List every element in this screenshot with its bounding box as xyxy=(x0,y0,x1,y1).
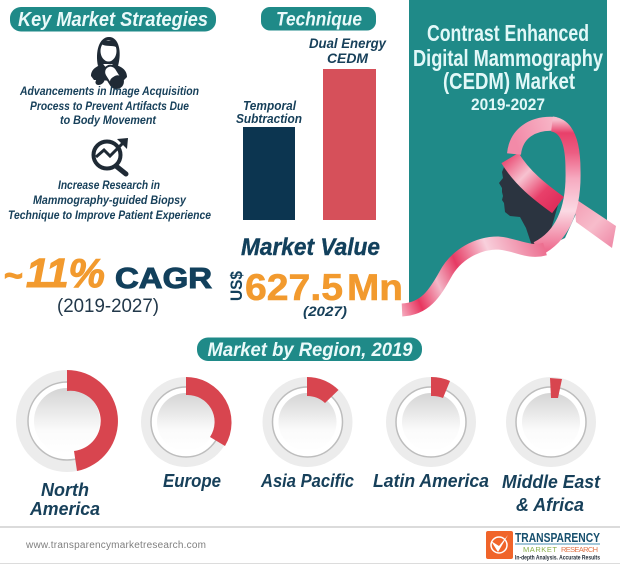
title: (CEDM) Market xyxy=(443,68,575,94)
stat: market value: 627.5 xyxy=(245,267,343,308)
donut: Middle East & Africa xyxy=(506,377,596,467)
donut: North America xyxy=(16,370,118,472)
label: Middle East & Africa xyxy=(502,472,601,515)
label: Temporal Subtraction xyxy=(236,99,302,126)
icon: magnifier with trend arrow xyxy=(94,138,128,174)
text: strategy one xyxy=(19,86,199,127)
label: North America: North xyxy=(41,480,89,500)
donut: Europe xyxy=(141,377,232,467)
label: North America: America xyxy=(29,499,100,519)
label: Dual Energy CEDM: Dual Energy xyxy=(309,36,387,51)
text: strategy one: to Body Movement xyxy=(60,115,157,127)
bar: Dual Energy CEDM xyxy=(323,69,376,220)
title: 2019-2027 xyxy=(471,95,545,114)
icon: woman with pill xyxy=(91,37,127,90)
logo: Transparency Market Research xyxy=(486,531,601,562)
label: Latin America: Latin America xyxy=(373,471,489,491)
text: strategy two: Mammography-guided Biopsy xyxy=(33,195,187,207)
label: Dual Energy CEDM: CEDM xyxy=(327,51,369,66)
illustration: woman silhouette and pink ribbon xyxy=(402,124,616,310)
bar: Temporal Subtraction xyxy=(243,127,295,220)
label: Dual Energy CEDM xyxy=(309,36,387,66)
text: strategy one: Process to Prevent Artifacts Due xyxy=(30,101,190,113)
stat: market value: US$ xyxy=(227,271,246,301)
label: Europe: Europe xyxy=(163,471,221,491)
title xyxy=(413,20,603,114)
stat: CAGR: ~ xyxy=(4,257,23,295)
stat: market value: Market Value xyxy=(241,234,380,261)
stat: market value: Mn xyxy=(347,267,403,308)
bar chart: technique xyxy=(236,36,387,220)
text: strategy two: Technique to Improve Patient Experience xyxy=(8,210,212,222)
heading: Key Market Strategies: Key Market Strategies xyxy=(18,9,208,31)
donut: Asia Pacific xyxy=(262,377,352,467)
logo: Transparency Market Research: TRANSPARENCY xyxy=(515,531,601,545)
footer lines xyxy=(0,526,620,528)
stat: CAGR: CAGR xyxy=(115,263,212,295)
stat: CAGR: 11% xyxy=(26,250,105,296)
stat: market value: (2027) xyxy=(303,303,347,319)
footer: website: www.transparencymarketresearch.com xyxy=(25,540,206,551)
label: Asia Pacific: Asia Pacific xyxy=(260,471,354,491)
stat: market value xyxy=(227,234,403,319)
donut: Latin America xyxy=(386,377,476,467)
text: strategy one: Advancements in Image Acquisition xyxy=(19,86,199,98)
panel: title background xyxy=(409,0,607,303)
heading: Market by Region, 2019: Market by Region, 2019 xyxy=(208,340,413,361)
stat: CAGR: (2019-2027) xyxy=(57,296,159,317)
text: strategy two xyxy=(8,180,212,222)
label: North America xyxy=(29,480,100,519)
label: Middle East & Africa: & Africa xyxy=(516,495,584,515)
logo: Transparency Market Research: RESEARCH xyxy=(561,545,598,554)
label: Temporal Subtraction: Temporal xyxy=(243,99,296,113)
label: Middle East & Africa: Middle East xyxy=(502,472,601,492)
stat: CAGR xyxy=(4,250,212,317)
logo: Transparency Market Research: MARKET xyxy=(523,545,557,554)
heading: Technique: Technique xyxy=(276,10,362,30)
label: Temporal Subtraction: Subtraction xyxy=(236,112,302,126)
logo: Transparency Market Research: In-depth Analysis. Accurate Results xyxy=(515,556,601,562)
text: strategy two: Increase Research in xyxy=(58,180,160,192)
